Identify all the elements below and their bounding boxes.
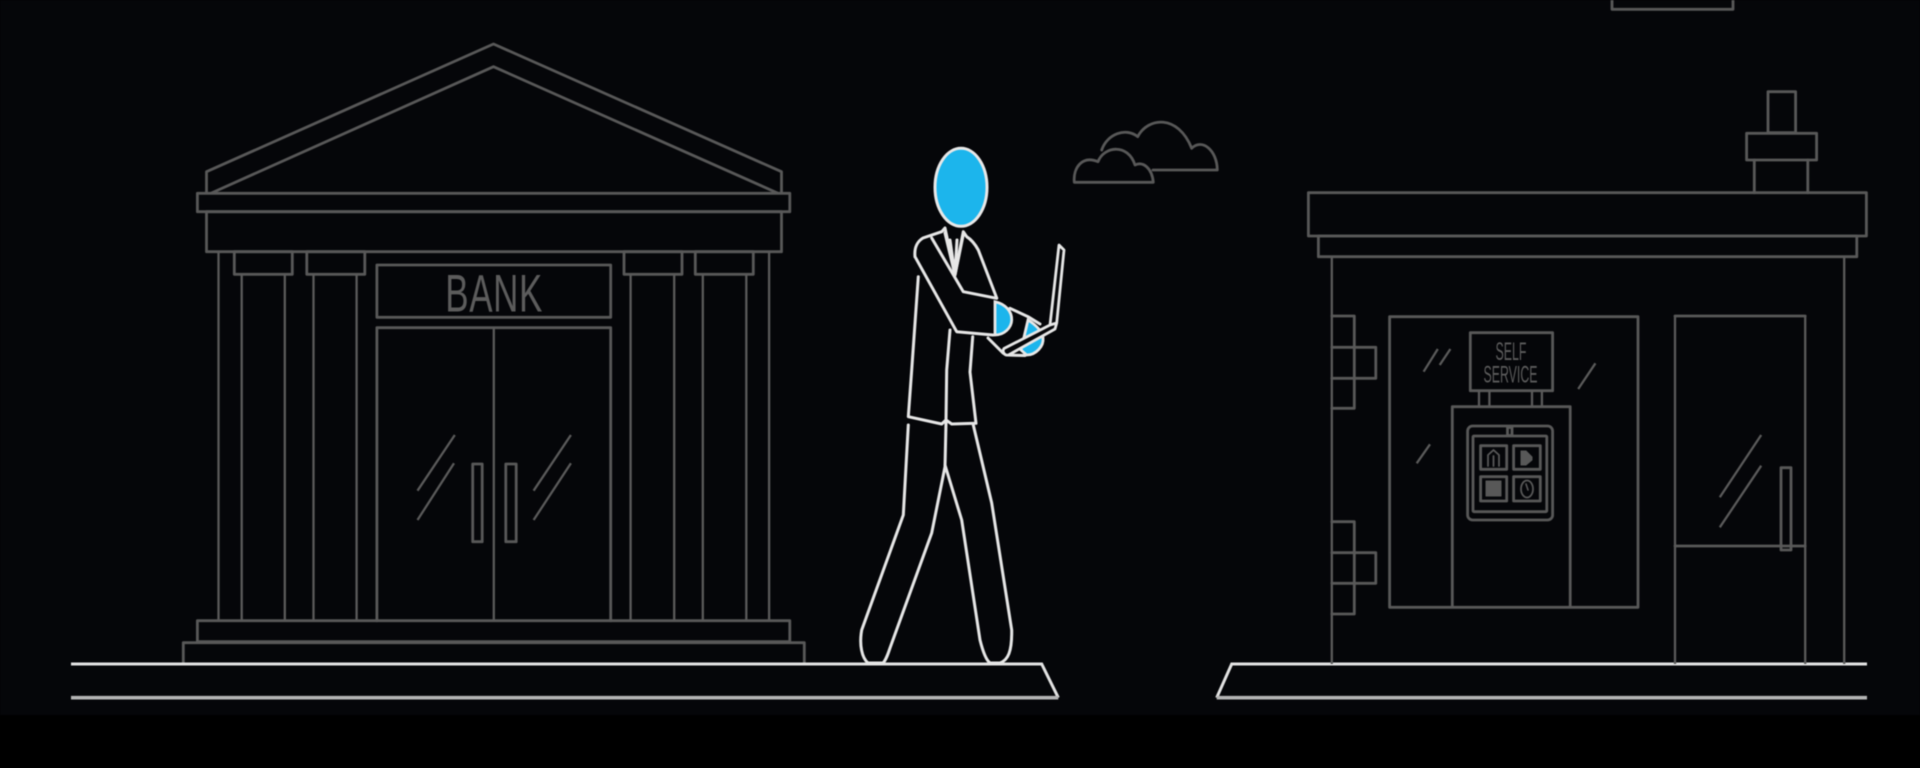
kiosk tablet screen bbox=[1468, 426, 1553, 520]
jacket bbox=[908, 228, 997, 424]
tablet app icons bbox=[1481, 446, 1540, 501]
bank columns bbox=[218, 252, 769, 621]
bank double doors bbox=[377, 328, 611, 621]
walking person with laptop bbox=[861, 148, 1064, 663]
self service sign: SELF bbox=[1496, 338, 1526, 366]
shop door bbox=[1675, 316, 1805, 664]
self service kiosk bbox=[1452, 407, 1570, 607]
clouds bbox=[1074, 122, 1217, 182]
far hand bbox=[1021, 320, 1043, 355]
bank column capitals bbox=[234, 252, 753, 274]
bank building bbox=[183, 44, 804, 664]
shop walls bbox=[1332, 257, 1844, 664]
ground platform left bbox=[71, 664, 1058, 698]
head bbox=[935, 148, 987, 226]
hanging element at top edge bbox=[1612, 0, 1733, 9]
bank name sign: BANK bbox=[445, 263, 542, 323]
near hand bbox=[995, 302, 1012, 335]
self service sign bbox=[1470, 333, 1553, 407]
laptop bbox=[1003, 245, 1064, 355]
chimney bbox=[1747, 92, 1817, 193]
shop roof bbox=[1308, 193, 1866, 257]
shop window bbox=[1390, 317, 1638, 607]
self-service shop bbox=[1308, 92, 1866, 664]
bank pediment roof bbox=[206, 44, 782, 193]
bank name sign bbox=[377, 263, 611, 323]
wall quoin bricks bbox=[1332, 316, 1376, 614]
bank steps bbox=[183, 621, 804, 664]
far forearm bbox=[988, 308, 1040, 356]
legs bbox=[861, 423, 1012, 663]
ground platform right bbox=[1217, 664, 1867, 698]
bank cornice and entablature bbox=[197, 193, 790, 252]
self service sign: SERVICE bbox=[1484, 362, 1538, 389]
